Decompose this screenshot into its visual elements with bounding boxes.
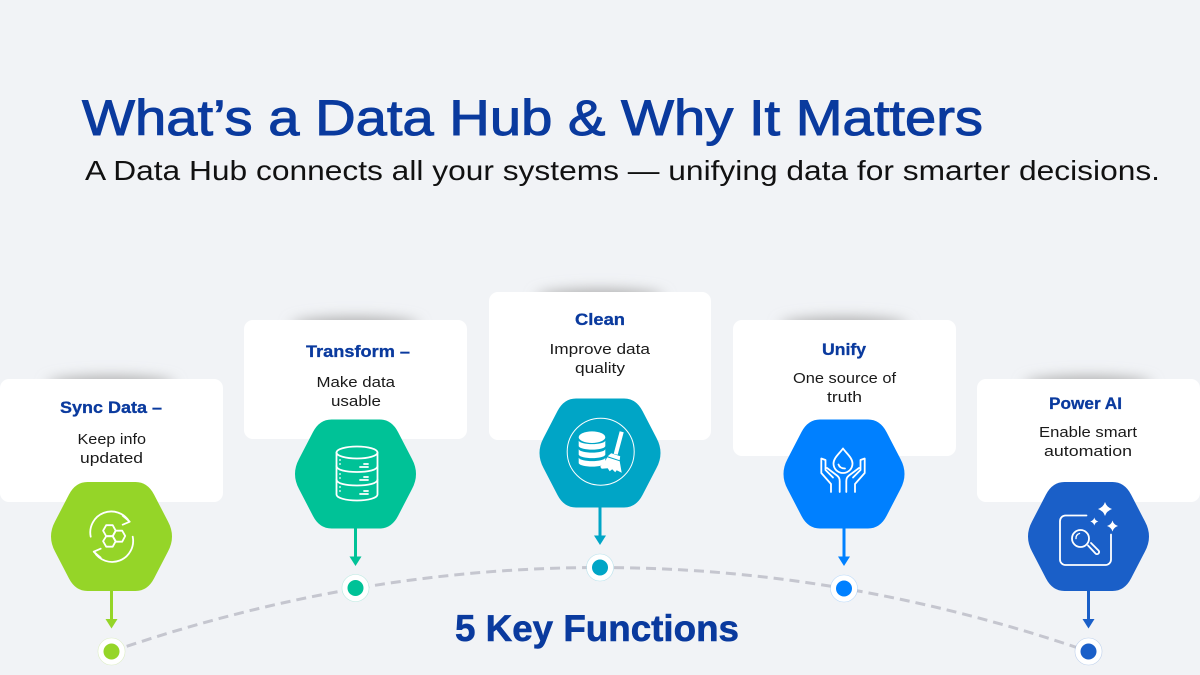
heading: 5 Key Functions: 5 Key Functions [455, 608, 739, 649]
arrow [350, 528, 362, 566]
subtitle: A Data Hub connects all your systems — unifying data for smarter decisions. [85, 155, 1160, 186]
hexagon [540, 398, 660, 508]
arrow [1082, 591, 1094, 628]
panel: Unify [733, 318, 956, 602]
text: Make data usable: Make data [316, 374, 396, 391]
text: Keep info updated [78, 431, 146, 467]
icon: database and broom [567, 418, 634, 485]
heading: Unify: Unify [822, 340, 867, 359]
heading: Sync Data: Sync Data – [60, 398, 162, 417]
panel: Power AI [977, 377, 1200, 665]
text: Keep info updated: updated [80, 450, 143, 467]
timeline node [342, 574, 369, 602]
hexagon [295, 420, 416, 528]
text: Improve data quality [550, 341, 651, 377]
icon: sync with honeycomb [90, 511, 133, 562]
text: One source of truth: One source of [793, 370, 897, 387]
arrow [594, 507, 606, 545]
timeline node [98, 638, 125, 665]
heading: Power AI: Power AI [1049, 394, 1122, 413]
text: Enable smart automation: Enable smart [1039, 424, 1138, 441]
text: Enable smart automation [1039, 424, 1138, 460]
panel: Sync Data [0, 377, 223, 665]
arrow [106, 591, 118, 628]
heading: Clean: Clean [575, 310, 625, 329]
timeline node [586, 554, 614, 581]
hexagon [784, 420, 904, 528]
panel: Transform [244, 318, 467, 602]
text: Improve data quality: quality [575, 360, 626, 377]
text: Improve data quality: Improve data [550, 341, 651, 358]
text: Keep info updated: Keep info [78, 431, 146, 448]
arrow [838, 528, 850, 566]
hexagon [51, 482, 172, 591]
timeline node [830, 575, 858, 602]
text: Make data usable: usable [331, 393, 381, 410]
timeline node [1075, 638, 1102, 665]
dashed arc connecting the five functions [112, 568, 1088, 652]
text: Make data usable [316, 374, 396, 410]
heading: Transform: Transform – [306, 342, 410, 361]
panel: Clean [489, 290, 711, 581]
title: What’s a Data Hub & Why It Matters [82, 90, 983, 146]
icon: hands holding drop [821, 448, 865, 492]
text: Enable smart automation: automation [1044, 443, 1132, 460]
icon: database [336, 446, 378, 500]
text: One source of truth [793, 370, 897, 406]
text: One source of truth: truth [827, 389, 862, 406]
icon: AI search [1060, 502, 1118, 565]
hexagon [1028, 482, 1149, 591]
